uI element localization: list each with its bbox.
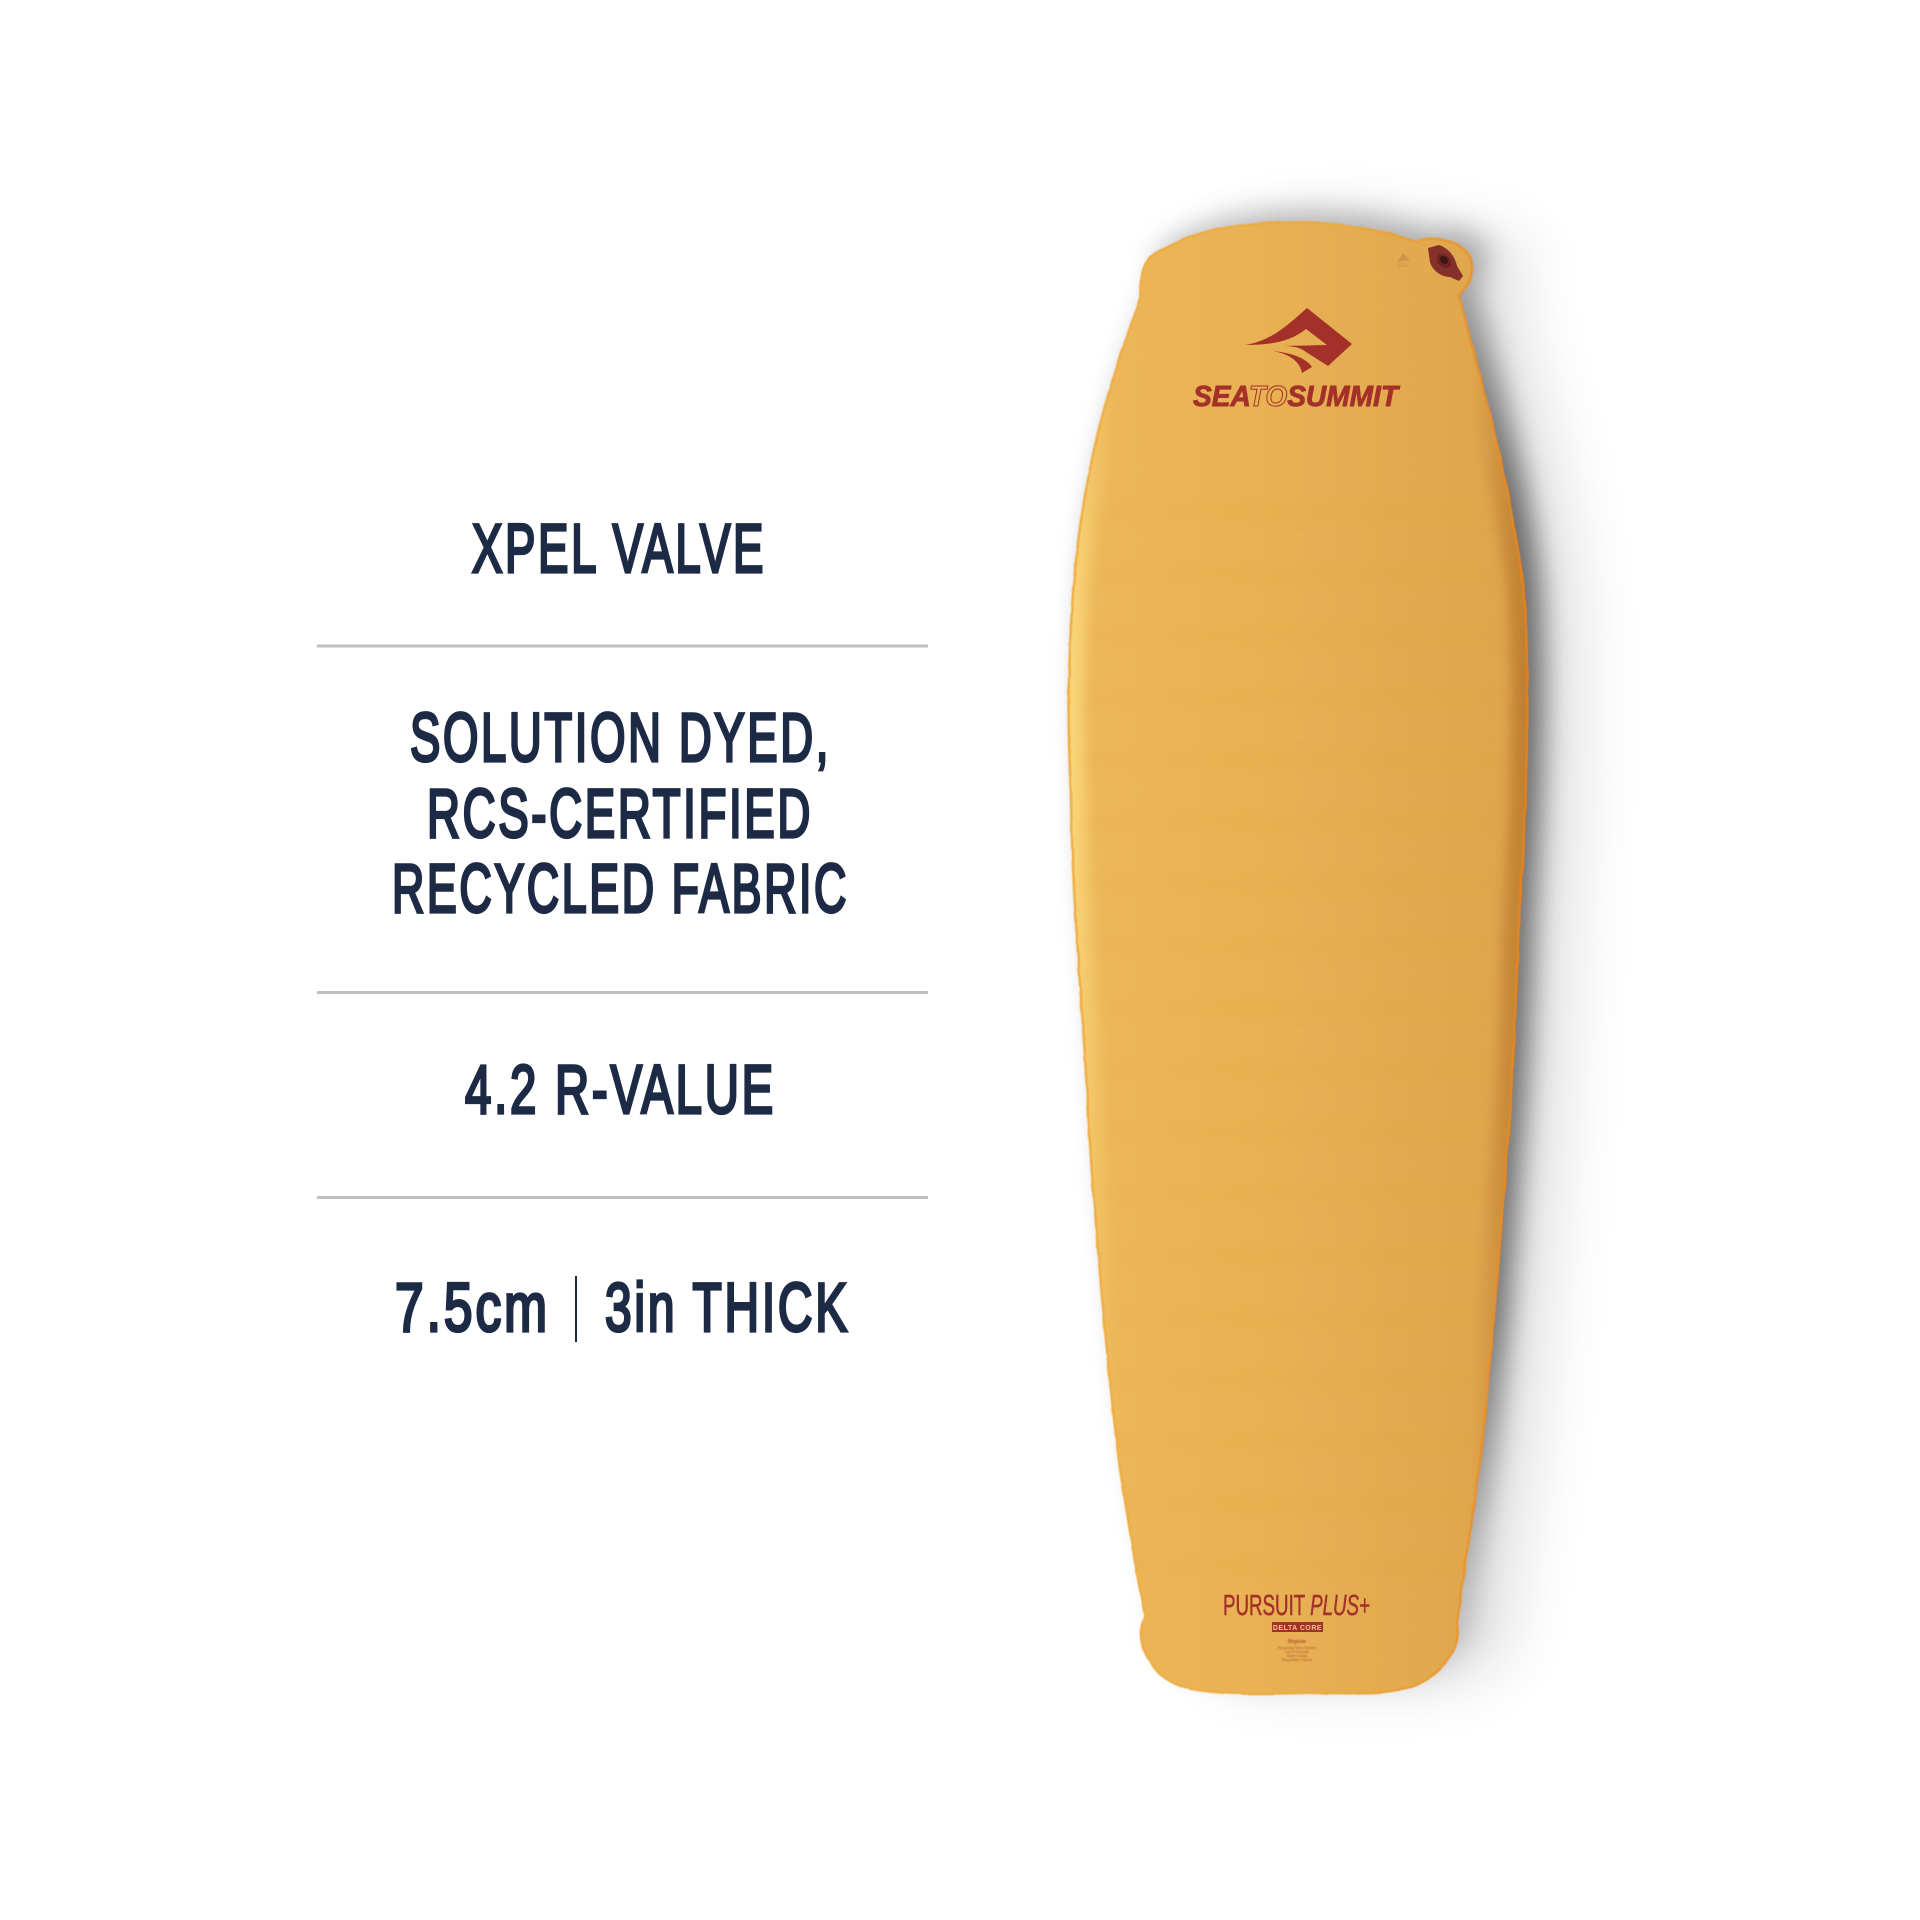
feature: R-value: 4.2 R-VALUE bbox=[465, 1051, 776, 1128]
feature: thickness: 7.5cm bbox=[395, 1269, 550, 1346]
feature: recycled fabric bbox=[392, 699, 849, 927]
small label near valve: SEA bbox=[1397, 263, 1408, 269]
delta core badge: DELTA CORE bbox=[1273, 1625, 1322, 1632]
logo mark bbox=[1245, 308, 1352, 373]
size and spec text: Made in Asia bbox=[1287, 1654, 1307, 1658]
feature: recycled fabric: RECYCLED FABRIC bbox=[392, 850, 849, 927]
sleeping mat product bbox=[1060, 210, 1585, 1694]
feature: recycled fabric: SOLUTION DYED, bbox=[410, 699, 831, 776]
size and spec text bbox=[1278, 1639, 1316, 1662]
mat drop shadow bbox=[1085, 210, 1585, 1688]
feature: thickness bbox=[395, 1269, 850, 1346]
size and spec text: Low R-Durable bbox=[1285, 1650, 1309, 1654]
delta core badge bbox=[1272, 1622, 1323, 1632]
valve bbox=[1428, 245, 1463, 281]
mat body bbox=[1060, 222, 1540, 1694]
product name: PURSUIT PLUS+ bbox=[1223, 1590, 1370, 1622]
brand logo bbox=[1193, 308, 1400, 413]
feature: thickness: 3in THICK bbox=[605, 1269, 850, 1346]
feature: XPEL valve: XPEL VALVE bbox=[472, 510, 766, 587]
feature: recycled fabric: RCS-CERTIFIED bbox=[427, 775, 813, 852]
logo wordmark: SEATOSUMMIT bbox=[1193, 381, 1400, 413]
size and spec text: Recycling Valve System bbox=[1278, 1646, 1316, 1650]
product name bbox=[1223, 1590, 1370, 1662]
panel: feature list bbox=[317, 510, 928, 1346]
small label near valve bbox=[1397, 253, 1410, 269]
size and spec text: Regular bbox=[1288, 1639, 1307, 1645]
size and spec text: Recyclable Fabrics bbox=[1282, 1658, 1312, 1662]
